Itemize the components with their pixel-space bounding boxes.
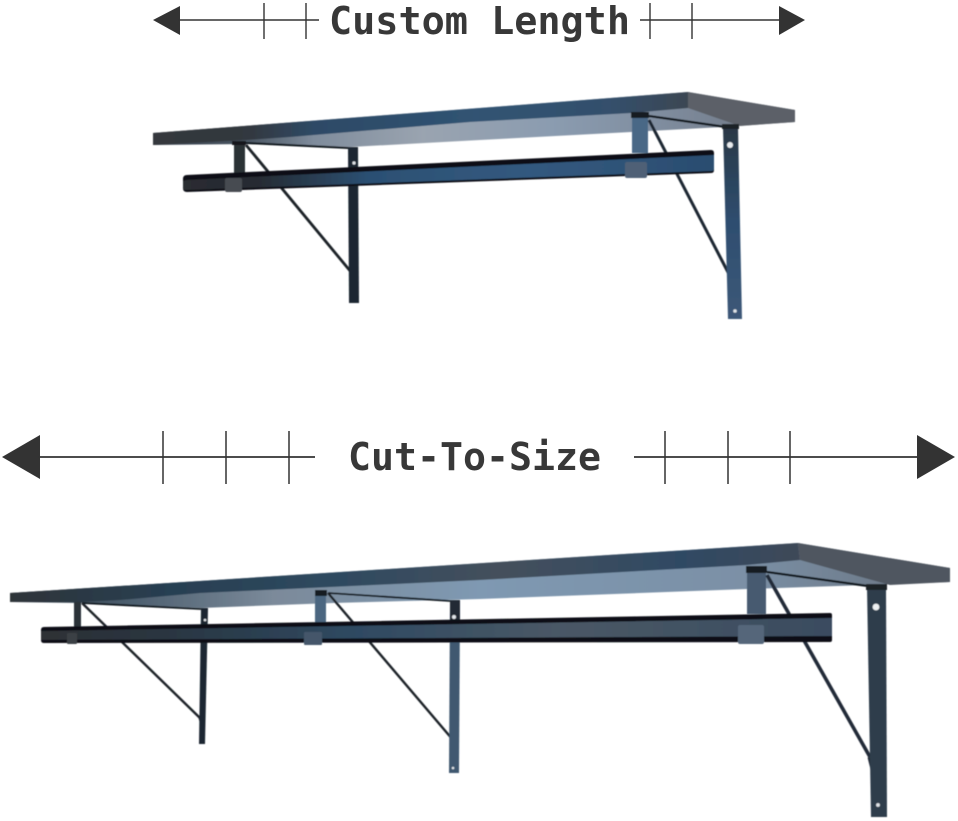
heading: Custom Length: Custom Length: [329, 0, 630, 44]
shelf with three brackets: cut to size: [10, 543, 950, 817]
heading: Cut-To-Size: Cut-To-Size: [348, 435, 601, 479]
shelf with two brackets: custom length: [153, 92, 795, 319]
dimension arrow: Custom Length: [153, 3, 805, 39]
dimension arrow: Cut-To-Size: [2, 431, 955, 484]
